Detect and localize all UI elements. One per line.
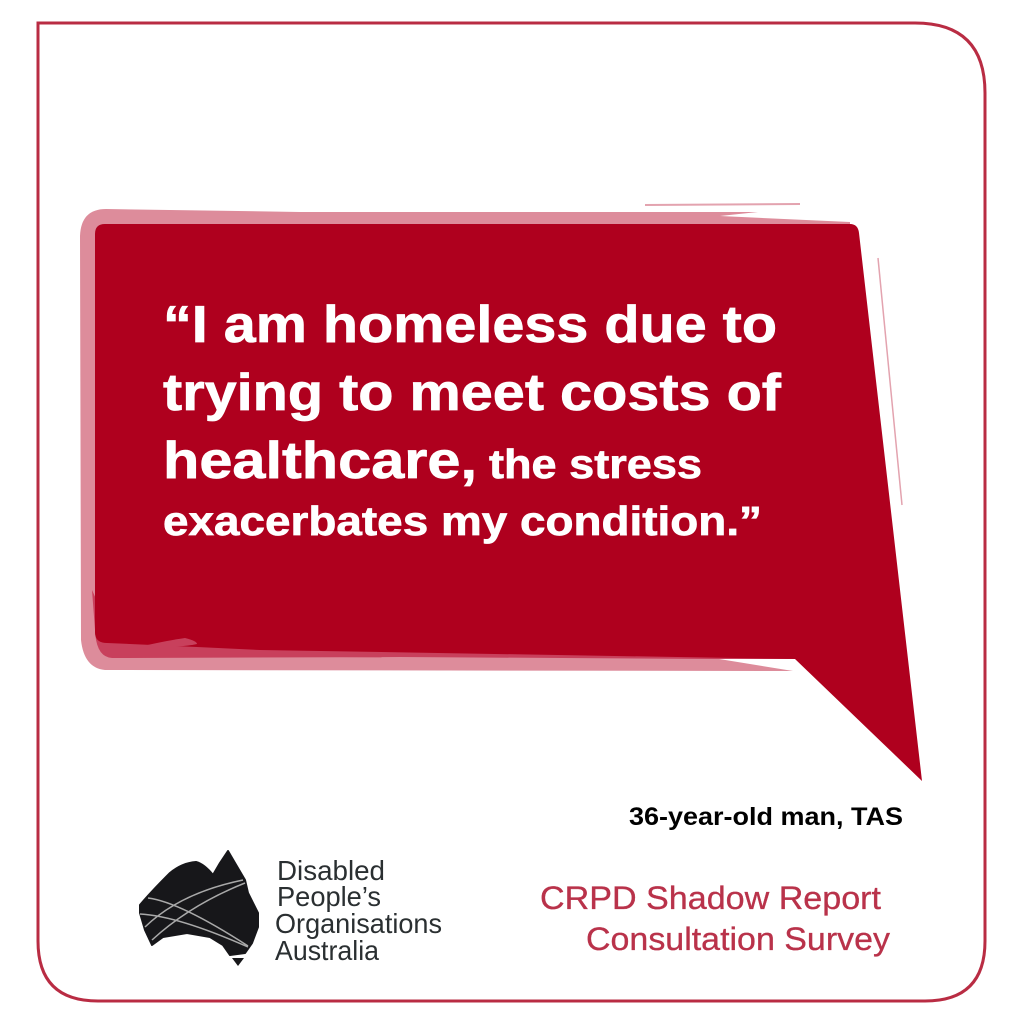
logo: organisation name: People’s	[277, 881, 381, 912]
quote text: exacerbates my condition.”	[163, 498, 762, 544]
survey label	[540, 880, 890, 957]
speech bubble	[80, 204, 922, 781]
quote text: trying to meet costs of	[163, 364, 782, 422]
quote text: “I am homeless due to	[163, 296, 777, 354]
attribution: 36-year-old man, TAS	[629, 803, 903, 831]
survey label: Consultation Survey	[586, 921, 890, 957]
quote text: the stress	[489, 441, 702, 487]
logo: organisation name: Organisations	[275, 908, 442, 939]
survey label: CRPD Shadow Report	[540, 880, 881, 916]
quote text: healthcare,	[163, 432, 477, 490]
logo: Australia map	[140, 851, 258, 966]
logo: organisation name: Disabled	[277, 855, 385, 886]
logo: organisation name: Australia	[275, 935, 379, 966]
logo: organisation name	[275, 855, 442, 966]
quote text	[163, 296, 782, 544]
